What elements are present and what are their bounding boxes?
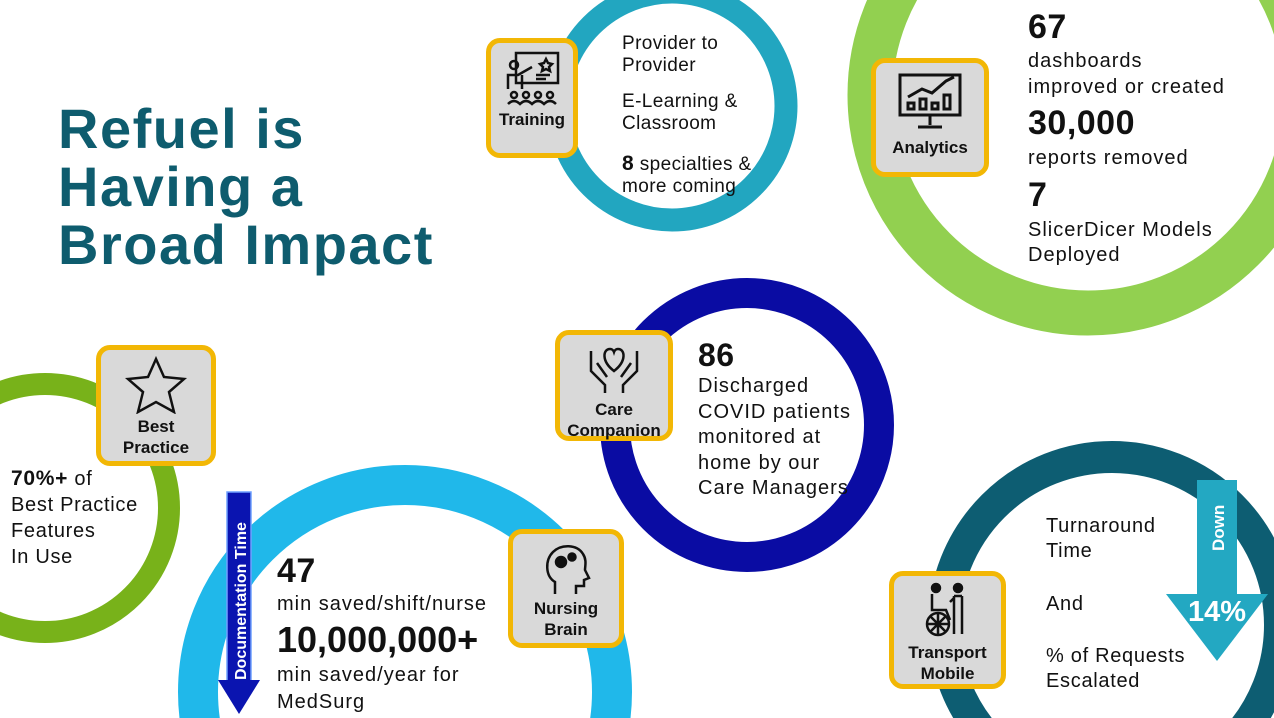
- text: care companion: monitored at: [698, 426, 821, 448]
- title: Broad Impact: [58, 213, 434, 276]
- icon: training: Training: [499, 110, 565, 129]
- text: nursing brain: min saved/shift/nurse min saved/year for: [277, 593, 487, 686]
- text: analytics: dashboards: [1028, 50, 1143, 72]
- icon: nursing brain: [508, 529, 624, 648]
- icon: care companion: Care: [595, 400, 633, 419]
- icon: training: [486, 38, 578, 158]
- text: nursing brain: MedSurg: [277, 691, 365, 713]
- title: Having a: [58, 155, 303, 218]
- text: training: Provider E-Learning &: [622, 55, 738, 112]
- text: best practice: [11, 467, 138, 568]
- text: best practice: 70%+ of: [11, 467, 92, 490]
- text: nursing brain: 47: [277, 552, 316, 590]
- icon: transport mobile: [889, 571, 1006, 689]
- text: transport mobile: Escalated: [1046, 670, 1140, 692]
- arrow: documentation time: [218, 491, 260, 714]
- text: analytics: Deployed: [1028, 244, 1121, 266]
- text: nursing brain: 10,000,000+: [277, 619, 478, 660]
- text: analytics: improved or created reports removed SlicerDicer Models: [1028, 76, 1225, 240]
- text: care companion: 86: [698, 337, 735, 373]
- text: nursing brain: [277, 552, 487, 713]
- arrow: documentation time: Documentation Time: [233, 522, 250, 680]
- icon: best practice: Best: [138, 417, 174, 436]
- icon: care companion: [555, 330, 673, 441]
- text: transport mobile: Time And % of Requests: [1046, 540, 1185, 667]
- text: best practice: In Use: [11, 546, 73, 568]
- text: training: more coming: [622, 176, 736, 197]
- icon: best practice: Practice: [123, 438, 189, 457]
- text: care companion: Discharged: [698, 375, 809, 397]
- text: analytics: 67: [1028, 8, 1067, 46]
- text: analytics: 30,000: [1028, 104, 1135, 142]
- text: training: Provider to: [622, 33, 718, 54]
- arrow: down 14%: 14%: [1188, 596, 1246, 628]
- title: [58, 97, 434, 276]
- text: analytics: [1028, 8, 1225, 266]
- text: care companion: Care Managers: [698, 477, 849, 499]
- icon: best practice: [96, 345, 216, 466]
- icon: nursing brain: Brain: [544, 620, 588, 639]
- text: best practice: Features: [11, 520, 96, 542]
- text: care companion: COVID patients: [698, 400, 851, 422]
- title: Refuel is: [58, 97, 305, 160]
- icon: analytics: [871, 58, 989, 177]
- icon: care companion: Companion: [567, 421, 661, 440]
- arrow: down 14%: [1166, 480, 1268, 661]
- icon: transport mobile: Transport: [908, 643, 987, 662]
- icon: nursing brain: Nursing: [534, 599, 598, 618]
- icon: transport mobile: Mobile: [921, 664, 974, 683]
- text: care companion: home by our: [698, 452, 820, 474]
- text: transport mobile: Turnaround: [1046, 515, 1156, 537]
- text: analytics: 7: [1028, 176, 1047, 214]
- icon: analytics: Analytics: [892, 138, 968, 157]
- text: training: Classroom 8 specialties &: [622, 113, 752, 175]
- text: care companion: [698, 337, 851, 499]
- arrow: down 14%: Down: [1209, 505, 1228, 551]
- text: training: [622, 33, 752, 197]
- text: best practice: Best Practice: [11, 494, 138, 516]
